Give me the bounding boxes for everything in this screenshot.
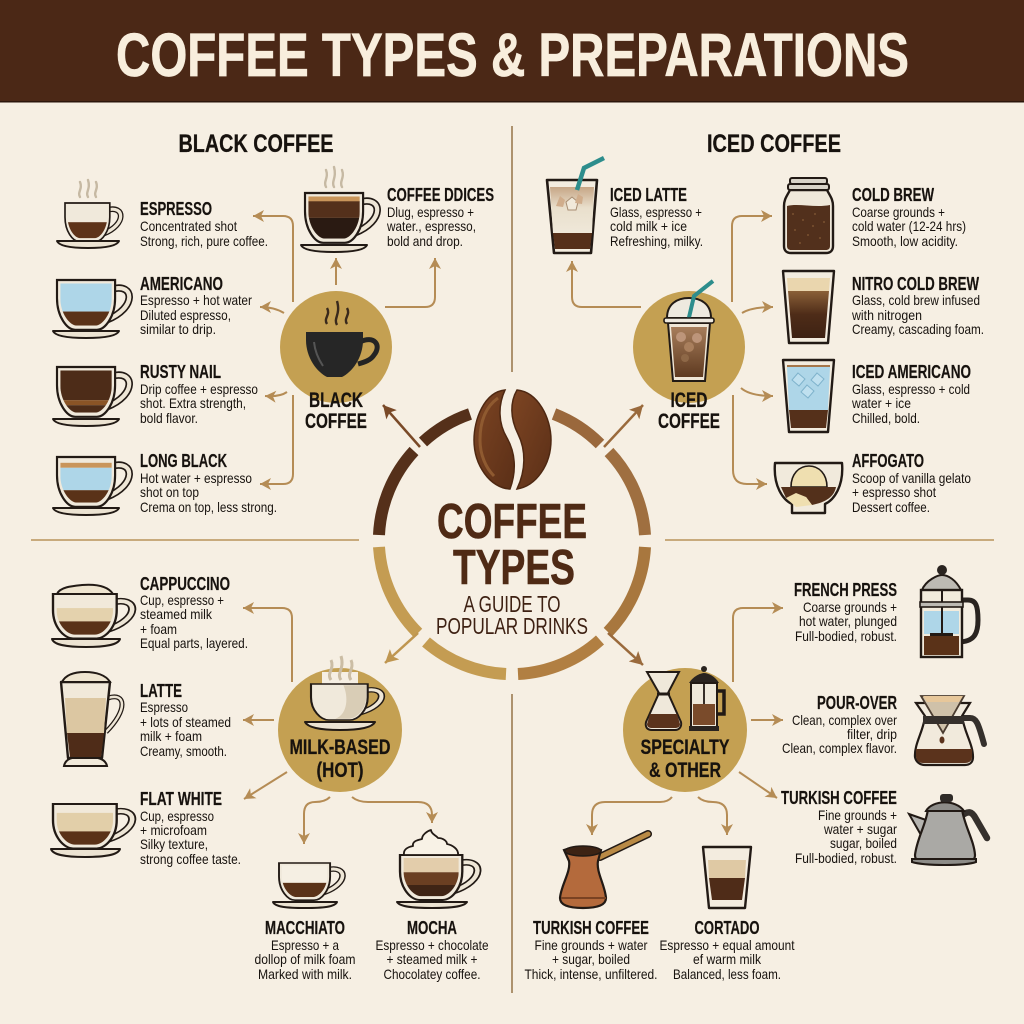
text: latte: Creamy, smooth. xyxy=(140,743,227,759)
text: iced americano: Chilled, bold. xyxy=(852,410,920,426)
text: turkish coffee bottom xyxy=(524,918,658,982)
text: affogato: AFFOGATO xyxy=(852,451,924,471)
text: cold brew: COLD BREW xyxy=(852,185,934,205)
heading: black coffee: BLACK COFFEE xyxy=(178,130,334,158)
ring segments xyxy=(379,414,645,674)
text: nitro cold brew: Creamy, cascading foam. xyxy=(852,321,984,337)
text: turkish coffee right: Full-bodied, robust. xyxy=(795,850,897,866)
text: cappuccino: + foam xyxy=(140,621,177,637)
title banner xyxy=(0,0,1024,102)
icon: kettle xyxy=(909,794,987,865)
item: turkish coffee right xyxy=(781,788,987,866)
item: cappuccino xyxy=(52,574,248,651)
text: long black: Crema on top, less strong. xyxy=(140,499,277,515)
text: cappuccino: steamed milk xyxy=(140,606,213,622)
item: french press xyxy=(794,565,978,657)
text: mocha: Chocolatey coffee. xyxy=(384,966,480,982)
item: coffee ddices xyxy=(301,167,494,252)
text: turkish coffee bottom: TURKISH COFFEE xyxy=(533,918,649,938)
icon: cold brew jar xyxy=(784,178,833,253)
icon: mocha cup xyxy=(397,830,477,908)
icon: small french press xyxy=(689,666,724,731)
text: macchiato: MACCHIATO xyxy=(265,918,345,938)
text: turkish coffee right: TURKISH COFFEE xyxy=(781,788,897,808)
text: cortado: Espresso + equal amount xyxy=(660,937,795,953)
text: iced americano xyxy=(851,362,971,426)
text: iced latte: cold milk + ice xyxy=(610,218,687,234)
central heading: A GUIDE TO xyxy=(464,591,560,617)
text: turkish coffee bottom: + sugar, boiled xyxy=(552,951,630,967)
text: affogato: Scoop of vanilla gelato xyxy=(852,470,971,486)
text: iced americano: Glass, espresso + cold xyxy=(852,381,970,397)
text: cappuccino xyxy=(140,574,248,651)
icon: cortado glass xyxy=(703,847,751,908)
text: affogato xyxy=(852,451,971,515)
icon: cezve xyxy=(560,834,648,908)
text: macchiato: Marked with milk. xyxy=(258,966,352,982)
text: iced latte: Refreshing, milky. xyxy=(610,233,703,249)
text: cold brew: Smooth, low acidity. xyxy=(852,233,958,249)
text: espresso: Strong, rich, pure coffee. xyxy=(140,233,268,249)
panel: milk-based hot xyxy=(51,574,489,982)
text: cappuccino: Equal parts, layered. xyxy=(140,635,248,651)
text: coffee ddices xyxy=(386,185,494,249)
text: rusty nail: Drip coffee + espresso xyxy=(140,381,258,397)
text: affogato: Dessert coffee. xyxy=(852,499,930,515)
text: cortado: Balanced, less foam. xyxy=(673,966,781,982)
hub: black coffee xyxy=(280,291,392,433)
hub: black coffee: BLACK xyxy=(309,389,363,412)
text: nitro cold brew: Glass, cold brew infused xyxy=(852,292,980,308)
text: cold brew: cold water (12-24 hrs) xyxy=(852,218,966,234)
text: turkish coffee right: sugar, boiled xyxy=(830,835,897,851)
text: latte: milk + foam xyxy=(140,728,202,744)
text: americano: Espresso + hot water xyxy=(140,292,252,308)
icon: affogato bowl xyxy=(775,463,842,513)
text: espresso: Concentrated shot xyxy=(140,218,237,234)
icon: americano cup xyxy=(53,280,129,338)
text: pour-over xyxy=(782,693,897,756)
icon: long black cup xyxy=(53,457,129,515)
text: rusty nail xyxy=(140,362,258,426)
text: long black xyxy=(140,451,277,515)
text: flat white: Cup, espresso xyxy=(140,808,214,824)
hub: iced coffee: COFFEE xyxy=(658,410,720,433)
item: turkish coffee bottom xyxy=(524,834,658,982)
text: long black: Hot water + espresso xyxy=(140,470,252,486)
text: mocha xyxy=(376,918,489,982)
arrows: black coffee xyxy=(253,216,435,484)
central hub: coffee types xyxy=(379,390,645,674)
text: americano xyxy=(140,274,252,337)
ring arrows xyxy=(383,405,643,665)
icon: rusty nail cup xyxy=(53,367,129,426)
text: pour-over: POUR-OVER xyxy=(817,693,897,713)
icon: chemex xyxy=(646,672,681,730)
text: cortado xyxy=(660,918,795,982)
text: french press: Full-bodied, robust. xyxy=(795,628,897,644)
text: cappuccino: Cup, espresso + xyxy=(140,592,224,608)
text: latte: Espresso xyxy=(140,699,188,715)
text: coffee ddices: water., espresso, xyxy=(386,218,476,234)
text: cold brew xyxy=(852,185,966,249)
text: americano: similar to drip. xyxy=(140,321,216,337)
item: mocha xyxy=(376,830,489,982)
text: turkish coffee right: Fine grounds + xyxy=(818,807,897,823)
text: long black: shot on top xyxy=(140,484,199,500)
icon: cappuccino cup xyxy=(52,585,132,647)
hub: iced coffee: ICED xyxy=(670,389,708,412)
hub: black coffee: COFFEE xyxy=(305,410,367,433)
hub: milk-based xyxy=(278,656,402,792)
heading: iced coffee: ICED COFFEE xyxy=(707,130,841,158)
text: iced latte: ICED LATTE xyxy=(610,185,687,205)
text: french press: Coarse grounds + xyxy=(803,599,897,615)
text: macchiato xyxy=(254,918,356,982)
text: coffee ddices: Dlug, espresso + xyxy=(387,204,474,220)
text: rusty nail: shot. Extra strength, xyxy=(140,395,246,411)
item: americano xyxy=(53,274,252,338)
item: flat white xyxy=(51,789,241,867)
text: iced americano: ICED AMERICANO xyxy=(852,362,971,382)
arrows: iced coffee xyxy=(572,216,773,484)
icon: coffee cup xyxy=(301,167,377,252)
icon: pour-over dripper xyxy=(915,696,984,765)
item: iced americano xyxy=(783,360,971,432)
text: macchiato: Espresso + a xyxy=(271,937,339,953)
icon: macchiato cup xyxy=(273,863,343,908)
item: affogato xyxy=(775,451,971,515)
item: pour-over xyxy=(782,693,984,765)
text: flat white: strong coffee taste. xyxy=(140,851,241,867)
icon: nitro glass xyxy=(783,271,834,343)
hub: specialty: & OTHER xyxy=(649,759,721,782)
text: iced latte xyxy=(610,185,703,249)
central heading xyxy=(436,495,588,639)
text: nitro cold brew: with nitrogen xyxy=(851,307,922,323)
text: espresso xyxy=(140,199,268,249)
text: mocha: Espresso + chocolate xyxy=(376,937,489,953)
item: long black xyxy=(53,451,277,515)
hub: iced coffee xyxy=(633,281,745,433)
panel: specialty and other xyxy=(524,565,987,982)
item: nitro cold brew xyxy=(783,271,984,343)
text: americano: AMERICANO xyxy=(140,274,223,294)
hub: milk-based: MILK-BASED xyxy=(290,736,390,759)
panel: black coffee xyxy=(53,130,494,515)
text: turkish coffee right: water + sugar xyxy=(823,821,897,837)
text: iced latte: Glass, espresso + xyxy=(610,204,702,220)
text: pour-over: Clean, complex over xyxy=(792,712,897,728)
text: mocha: + steamed milk + xyxy=(386,951,478,967)
item: macchiato xyxy=(254,863,356,982)
hub: milk-based: (HOT) xyxy=(316,759,364,782)
text: latte: + lots of steamed xyxy=(140,714,231,730)
text: coffee ddices: COFFEE DDICES xyxy=(387,185,494,205)
text: espresso: ESPRESSO xyxy=(140,199,212,219)
text: french press: hot water, plunged xyxy=(799,613,897,629)
central heading: TYPES xyxy=(453,541,575,595)
arrows: milk-based xyxy=(243,608,432,844)
text: iced americano: water + ice xyxy=(851,395,911,411)
item: cortado xyxy=(660,847,795,982)
text: coffee ddices: bold and drop. xyxy=(387,233,463,249)
icon: iced latte glass xyxy=(547,158,604,253)
icon: french press xyxy=(920,565,978,657)
item: rusty nail xyxy=(53,362,258,426)
hub: specialty: SPECIALTY xyxy=(640,736,730,759)
central heading: COFFEE xyxy=(437,495,587,549)
text: cortado: CORTADO xyxy=(694,918,760,938)
text: pour-over: Clean, complex flavor. xyxy=(782,740,897,756)
text: french press xyxy=(794,580,897,644)
arrows: specialty xyxy=(592,608,783,835)
text: macchiato: dollop of milk foam xyxy=(254,951,356,967)
text: latte xyxy=(140,681,231,759)
icon: espresso cup xyxy=(57,180,121,248)
text: flat white: Silky texture, xyxy=(140,836,208,852)
text: turkish coffee bottom: Fine grounds + water xyxy=(534,937,648,953)
icon: latte glass xyxy=(61,672,122,766)
item: espresso xyxy=(57,180,268,249)
icon: iced americano glass xyxy=(783,360,834,432)
item: latte xyxy=(61,672,231,766)
text: nitro cold brew xyxy=(851,274,984,337)
icon: coffee bean xyxy=(474,390,551,489)
text: long black: LONG BLACK xyxy=(140,451,227,471)
text: rusty nail: RUSTY NAIL xyxy=(140,362,221,382)
text: mocha: MOCHA xyxy=(407,918,457,938)
text: turkish coffee right xyxy=(781,788,897,866)
text: cappuccino: CAPPUCCINO xyxy=(140,574,230,594)
panel: iced coffee xyxy=(547,130,984,515)
text: rusty nail: bold flavor. xyxy=(140,410,198,426)
icon: flat white cup xyxy=(51,804,132,857)
text: pour-over: filter, drip xyxy=(847,726,897,742)
item: cold brew xyxy=(784,178,966,253)
text: flat white xyxy=(140,789,241,867)
text: turkish coffee bottom: Thick, intense, unfiltered. xyxy=(524,966,658,982)
text: americano: Diluted espresso, xyxy=(140,307,231,323)
text: affogato: + espresso shot xyxy=(852,484,936,500)
hub: specialty xyxy=(623,666,747,792)
central heading: POPULAR DRINKS xyxy=(436,613,588,639)
text: cold brew: Coarse grounds + xyxy=(852,204,945,220)
text: latte: LATTE xyxy=(140,681,182,701)
text: french press: FRENCH PRESS xyxy=(794,580,897,600)
text: flat white: + microfoam xyxy=(140,822,207,838)
text: nitro cold brew: NITRO COLD BREW xyxy=(852,274,979,294)
item: iced latte xyxy=(547,158,703,253)
text: cortado: ef warm milk xyxy=(693,951,762,967)
text: flat white: FLAT WHITE xyxy=(140,789,222,809)
